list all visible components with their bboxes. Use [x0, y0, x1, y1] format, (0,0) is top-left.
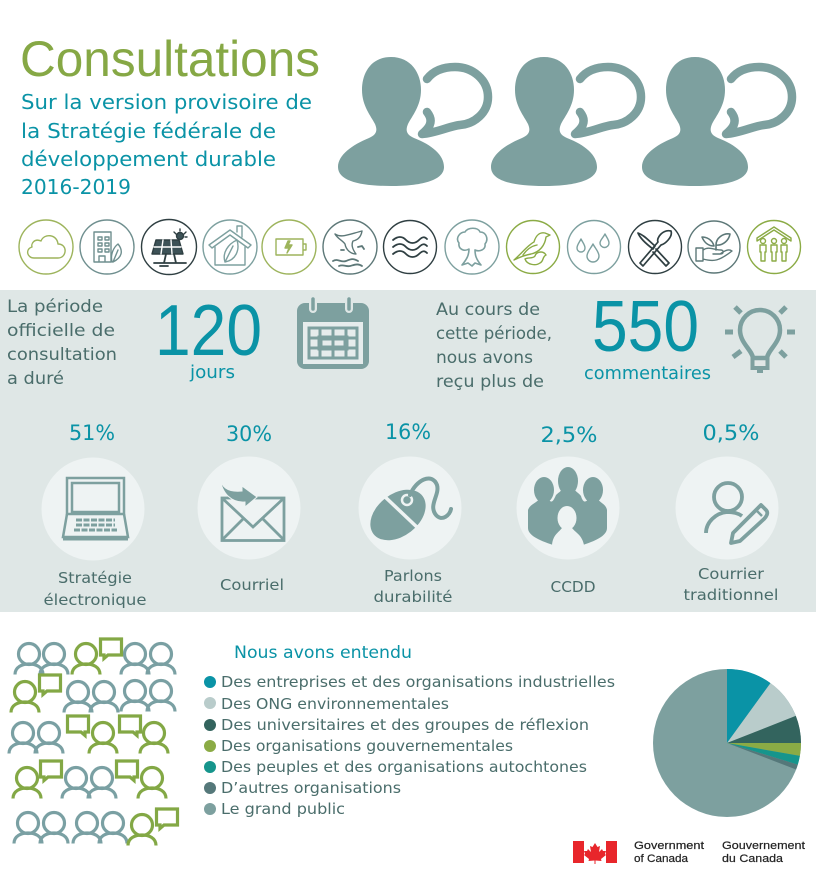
heading: Nous avons entendu: Nous avons entendu — [234, 643, 412, 662]
pie chart — [653, 669, 801, 817]
icon: solar panel — [142, 220, 196, 274]
text: consultation period: a duré — [7, 369, 64, 389]
icon: house with leaf — [203, 220, 257, 274]
channel: Parlons durabilité: 16% — [385, 420, 431, 445]
channel: CCDD: CCDD — [550, 578, 596, 596]
government of Canada signature: du Canada — [722, 853, 784, 865]
icon: whale tail and water — [323, 220, 377, 274]
text: comments received — [436, 300, 552, 392]
legend: Des peuples et des organisations autochtones — [221, 758, 587, 776]
text: comments received: nous avons — [436, 348, 533, 368]
channel: Courrier traditionnel — [676, 421, 778, 604]
legend: Des organisations gouvernementales — [221, 737, 513, 755]
icon: battery — [262, 220, 316, 274]
icon: three people speaking — [338, 57, 792, 186]
legend: Le grand public — [221, 800, 345, 818]
icon: knife and fork — [628, 220, 682, 274]
channel: Stratégie électronique: Stratégie — [58, 569, 132, 587]
channel: Courriel: Courriel — [220, 576, 284, 594]
text: consultation period: La période — [7, 297, 103, 317]
channel: Stratégie électronique — [42, 421, 146, 609]
government of Canada signature: of Canada — [634, 853, 689, 865]
channel: Courrier traditionnel: traditionnel — [684, 586, 778, 604]
icon: light bulb — [725, 307, 795, 371]
icon: Canadian flag — [573, 841, 617, 864]
subtitle — [21, 90, 312, 199]
government of Canada signature — [573, 840, 805, 865]
icon: hand with plant — [688, 221, 740, 273]
icon: laptop — [63, 478, 128, 539]
legend: D’autres organisations — [221, 779, 401, 797]
text: consultation period: consultation — [7, 345, 117, 365]
channel: Parlons durabilité: durabilité — [374, 588, 452, 606]
channel: CCDD: 2,5% — [540, 423, 598, 448]
channel: Stratégie électronique: 51% — [69, 421, 115, 446]
legend: Des universitaires et des groupes de réflexion — [221, 716, 589, 734]
channel: Courriel — [198, 422, 300, 594]
stat: 120 days: 120 — [155, 291, 262, 371]
subtitle: Sur la version provisoire de — [21, 90, 312, 114]
channel: Courrier traditionnel: 0,5% — [702, 421, 760, 446]
icon: group of people — [528, 467, 607, 553]
legend: Des entreprises et des organisations industrielles — [221, 673, 615, 691]
legend: Des ONG environnementales — [221, 695, 449, 713]
subtitle: 2016-2019 — [21, 175, 131, 199]
icon: computer mouse — [361, 478, 451, 551]
text: consultation period: officielle de — [7, 321, 115, 341]
icon: envelope with arrow — [220, 478, 284, 540]
icon: people under roof — [748, 220, 800, 274]
icon: person writing — [706, 483, 767, 543]
channel: Courrier traditionnel: Courrier — [698, 565, 765, 583]
stat: 550 comments: 550 — [592, 287, 699, 367]
icon: cloud — [19, 220, 73, 274]
text: comments received: reçu plus de — [436, 372, 544, 392]
panel: consultation statistics — [0, 287, 816, 612]
icon: bird — [506, 220, 560, 274]
text: comments received: Au cours de — [436, 300, 540, 320]
government of Canada signature: Government — [634, 840, 704, 852]
subtitle: la Stratégie fédérale de — [21, 119, 276, 143]
icon: waves — [384, 220, 436, 274]
title: Consultations — [20, 31, 320, 87]
subtitle: développement durable — [21, 147, 276, 171]
channel: Parlons durabilité: Parlons — [384, 567, 442, 585]
text: comments received: cette période, — [436, 324, 552, 344]
channel: Parlons durabilité — [358, 420, 462, 606]
icon: calendar — [297, 298, 369, 369]
crowd illustration — [9, 639, 178, 846]
government of Canada signature: Gouvernement — [722, 840, 805, 852]
channel: CCDD — [516, 423, 620, 596]
stat: 550 comments: commentaires — [584, 364, 711, 384]
theme icon row — [19, 220, 800, 274]
icon: green building — [80, 220, 134, 274]
channel: Courriel: 30% — [226, 422, 272, 447]
stat: 120 days: jours — [189, 362, 235, 383]
icon: water drops — [568, 220, 620, 274]
text: consultation period — [7, 297, 117, 389]
legend — [204, 673, 615, 818]
icon: tree — [445, 220, 499, 274]
channel: Stratégie électronique: électronique — [44, 591, 146, 609]
